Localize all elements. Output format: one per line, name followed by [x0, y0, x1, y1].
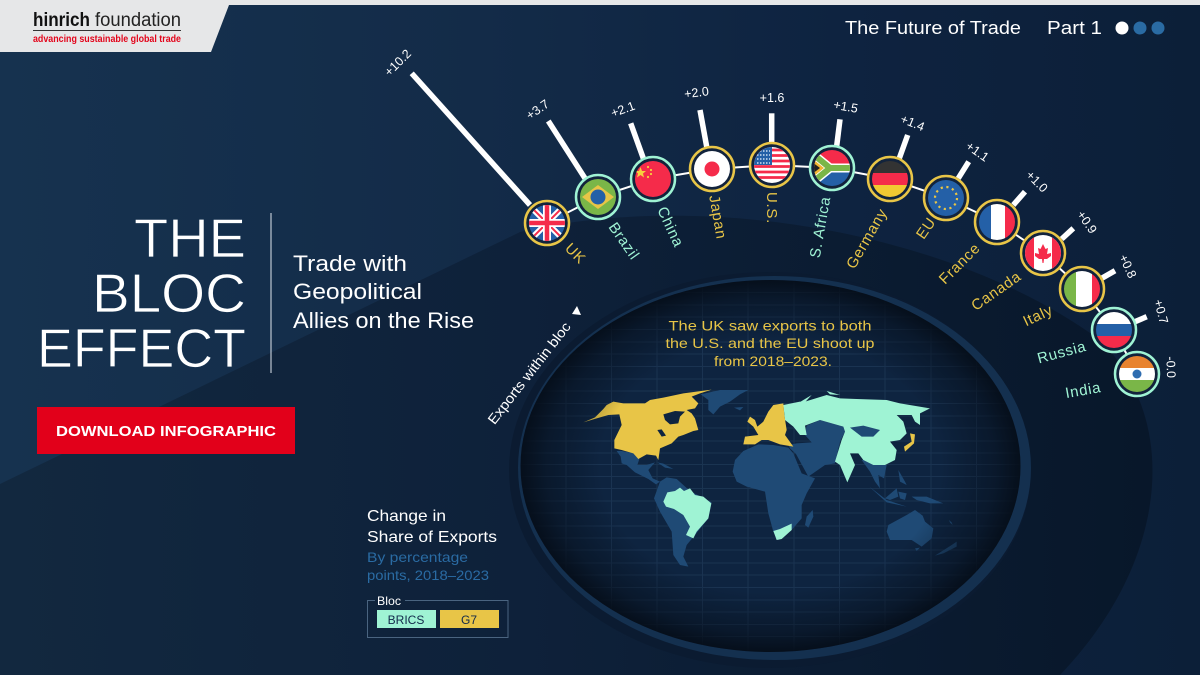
flag: South Africa	[810, 146, 854, 190]
value labels: +3.7	[524, 97, 552, 123]
legend: Bloc	[377, 594, 401, 608]
title: THE	[134, 207, 246, 269]
logo panel: advancing sustainable global trade	[33, 33, 181, 45]
flag: Japan	[690, 147, 734, 191]
value labels: +1.0	[1023, 168, 1051, 195]
country labels: UK	[561, 240, 589, 268]
axis label: exports within bloc: Exports within bloc	[484, 319, 574, 427]
value labels: +2.1	[609, 99, 637, 120]
callout: from 2018–2023.	[714, 353, 832, 369]
value labels: +1.5	[832, 98, 859, 116]
country labels: EU	[913, 214, 940, 242]
subtitle	[293, 251, 474, 333]
flag: China	[631, 157, 675, 201]
flag: Germany	[868, 157, 912, 201]
world map: Americas	[583, 390, 748, 567]
series header	[845, 18, 1164, 38]
value labels: +1.4	[898, 112, 927, 134]
flag: India	[1115, 352, 1159, 396]
callout	[666, 318, 875, 369]
country labels: Russia	[1035, 338, 1088, 367]
flag: Canada	[1021, 231, 1065, 275]
value bars	[412, 73, 1147, 322]
flag: UK	[525, 201, 569, 245]
subtitle: Geopolitical	[293, 279, 422, 304]
legend: G7	[461, 613, 477, 627]
legend	[367, 508, 508, 638]
download button: DOWNLOAD INFOGRAPHIC	[56, 423, 276, 440]
download button	[37, 407, 295, 454]
country labels: Brazil	[605, 219, 643, 263]
chain connector	[547, 165, 1137, 374]
value labels: +1.1	[963, 139, 991, 165]
subtitle: Trade with	[293, 251, 407, 276]
value labels: -0.0	[1163, 356, 1178, 378]
country labels: Germany	[843, 206, 891, 272]
background darker arc	[0, 216, 1152, 675]
country labels	[561, 192, 1102, 402]
legend: points, 2018–2023	[367, 567, 489, 583]
logo panel	[0, 0, 1200, 52]
value labels: +2.0	[683, 84, 710, 101]
legend: Share of Exports	[367, 529, 497, 546]
title: BLOC	[92, 262, 246, 324]
legend: BRICS	[388, 613, 424, 627]
flag: Italy	[1060, 267, 1104, 311]
country labels: France	[936, 240, 984, 288]
flag: France	[975, 200, 1019, 244]
country labels: S. Africa	[807, 195, 834, 259]
map lens	[500, 270, 1040, 668]
series header: Part 1	[1047, 18, 1102, 38]
value labels: +10.2	[382, 47, 414, 79]
flag: Brazil	[576, 175, 620, 219]
callout: the U.S. and the EU shoot up	[666, 335, 875, 351]
country labels: China	[653, 204, 687, 250]
country labels: Italy	[1020, 302, 1056, 330]
country labels: India	[1064, 379, 1102, 402]
country labels: Japan	[705, 194, 730, 241]
title	[37, 207, 246, 379]
country labels: Canada	[968, 268, 1025, 315]
subtitle: Allies on the Rise	[293, 308, 474, 333]
flag: Russia	[1092, 308, 1136, 352]
callout: The UK saw exports to both	[668, 318, 872, 334]
flag: U.S.	[750, 143, 794, 187]
logo panel: hinrich	[33, 10, 90, 31]
flag: EU	[924, 176, 968, 220]
legend: By percentage	[367, 549, 468, 565]
legend: Change in	[367, 508, 446, 525]
country labels: U.S.	[763, 192, 780, 224]
value labels: +0.7	[1151, 298, 1171, 325]
value labels: +1.6	[760, 91, 784, 105]
value labels: +0.8	[1116, 252, 1139, 280]
title: EFFECT	[37, 317, 246, 379]
value labels: +0.9	[1074, 208, 1100, 236]
value labels	[382, 47, 1178, 378]
world map: Africa, Eurasia, Oceania	[733, 391, 957, 556]
logo panel: foundation	[95, 10, 181, 31]
series header: The Future of Trade	[845, 18, 1021, 38]
